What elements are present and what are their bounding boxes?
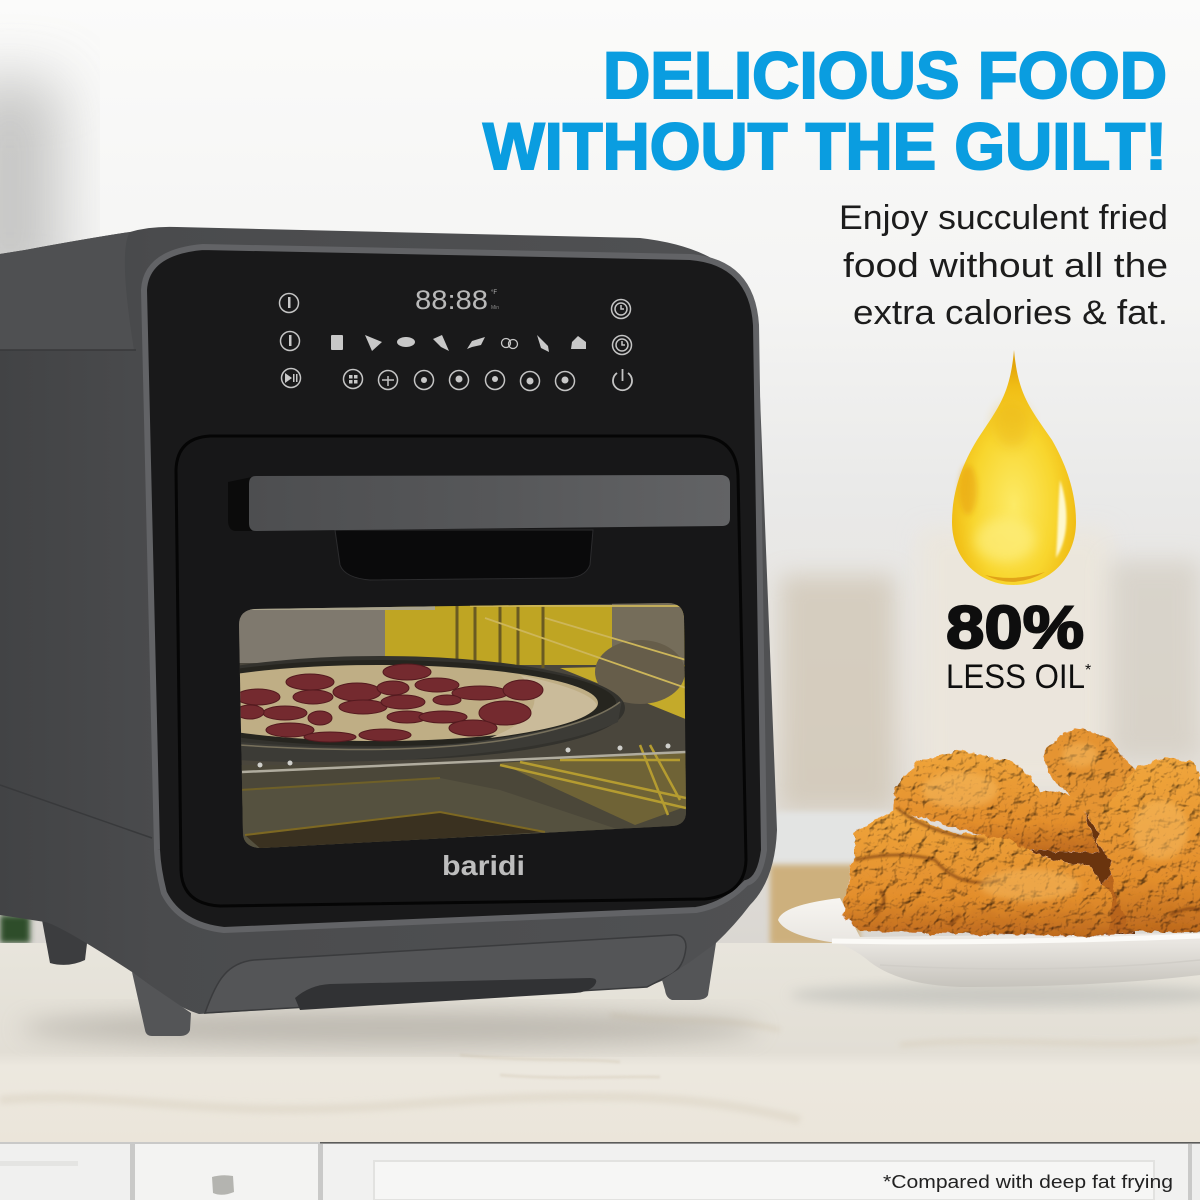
panel food and mode glyphs: [285, 297, 586, 384]
plate: [778, 898, 1200, 987]
stat: 80% less oil: [946, 594, 1091, 696]
counter top: [0, 943, 1200, 1142]
air fryer: °F: [491, 290, 497, 296]
footnote: *Compared with deep fat frying: [883, 1172, 1173, 1192]
chicken highlights: [922, 743, 1188, 901]
icon: cabinet knob: [212, 1175, 234, 1195]
fried chicken: [842, 728, 1200, 936]
paired egg glyph: [502, 338, 518, 348]
panel icon rings: [280, 294, 632, 390]
title: [483, 38, 1167, 183]
subtitle text block: [839, 199, 1168, 332]
air fryer: [0, 227, 777, 1046]
shadow between pieces: [1000, 790, 1135, 934]
fryer body: [0, 227, 777, 1014]
brand: baridi: [442, 850, 525, 881]
cabinets: [0, 1142, 1200, 1200]
lid top section: [0, 232, 134, 350]
back foot: [42, 920, 88, 965]
time display: 88:88: [415, 285, 488, 315]
title: WITHOUT THE GUILT!: [483, 109, 1167, 183]
stat: 80% less oil: *: [1085, 662, 1091, 679]
front face: [144, 247, 764, 930]
icon: oil drop: [952, 350, 1076, 585]
door handle recess: [335, 530, 593, 580]
chicken piece texture group: [842, 728, 1200, 936]
front feet: [132, 943, 716, 1036]
door handle cap: [228, 477, 252, 531]
stat: 80% less oil: 80%: [946, 594, 1084, 661]
subtitle text block: Enjoy succulent fried: [839, 199, 1168, 237]
shadow under fryer: [20, 1010, 760, 1046]
title: DELICIOUS FOOD: [603, 38, 1167, 112]
air fryer: Min: [491, 305, 499, 311]
door: [176, 436, 746, 906]
stat: 80% less oil: LESS OIL: [946, 658, 1085, 696]
oven window: [239, 603, 686, 848]
bottom drawer: [205, 935, 686, 1013]
chicken crevices: [855, 808, 1200, 925]
door handle: [249, 475, 730, 531]
subtitle text block: food without all the: [843, 247, 1168, 285]
subtitle text block: extra calories & fat.: [853, 294, 1168, 332]
